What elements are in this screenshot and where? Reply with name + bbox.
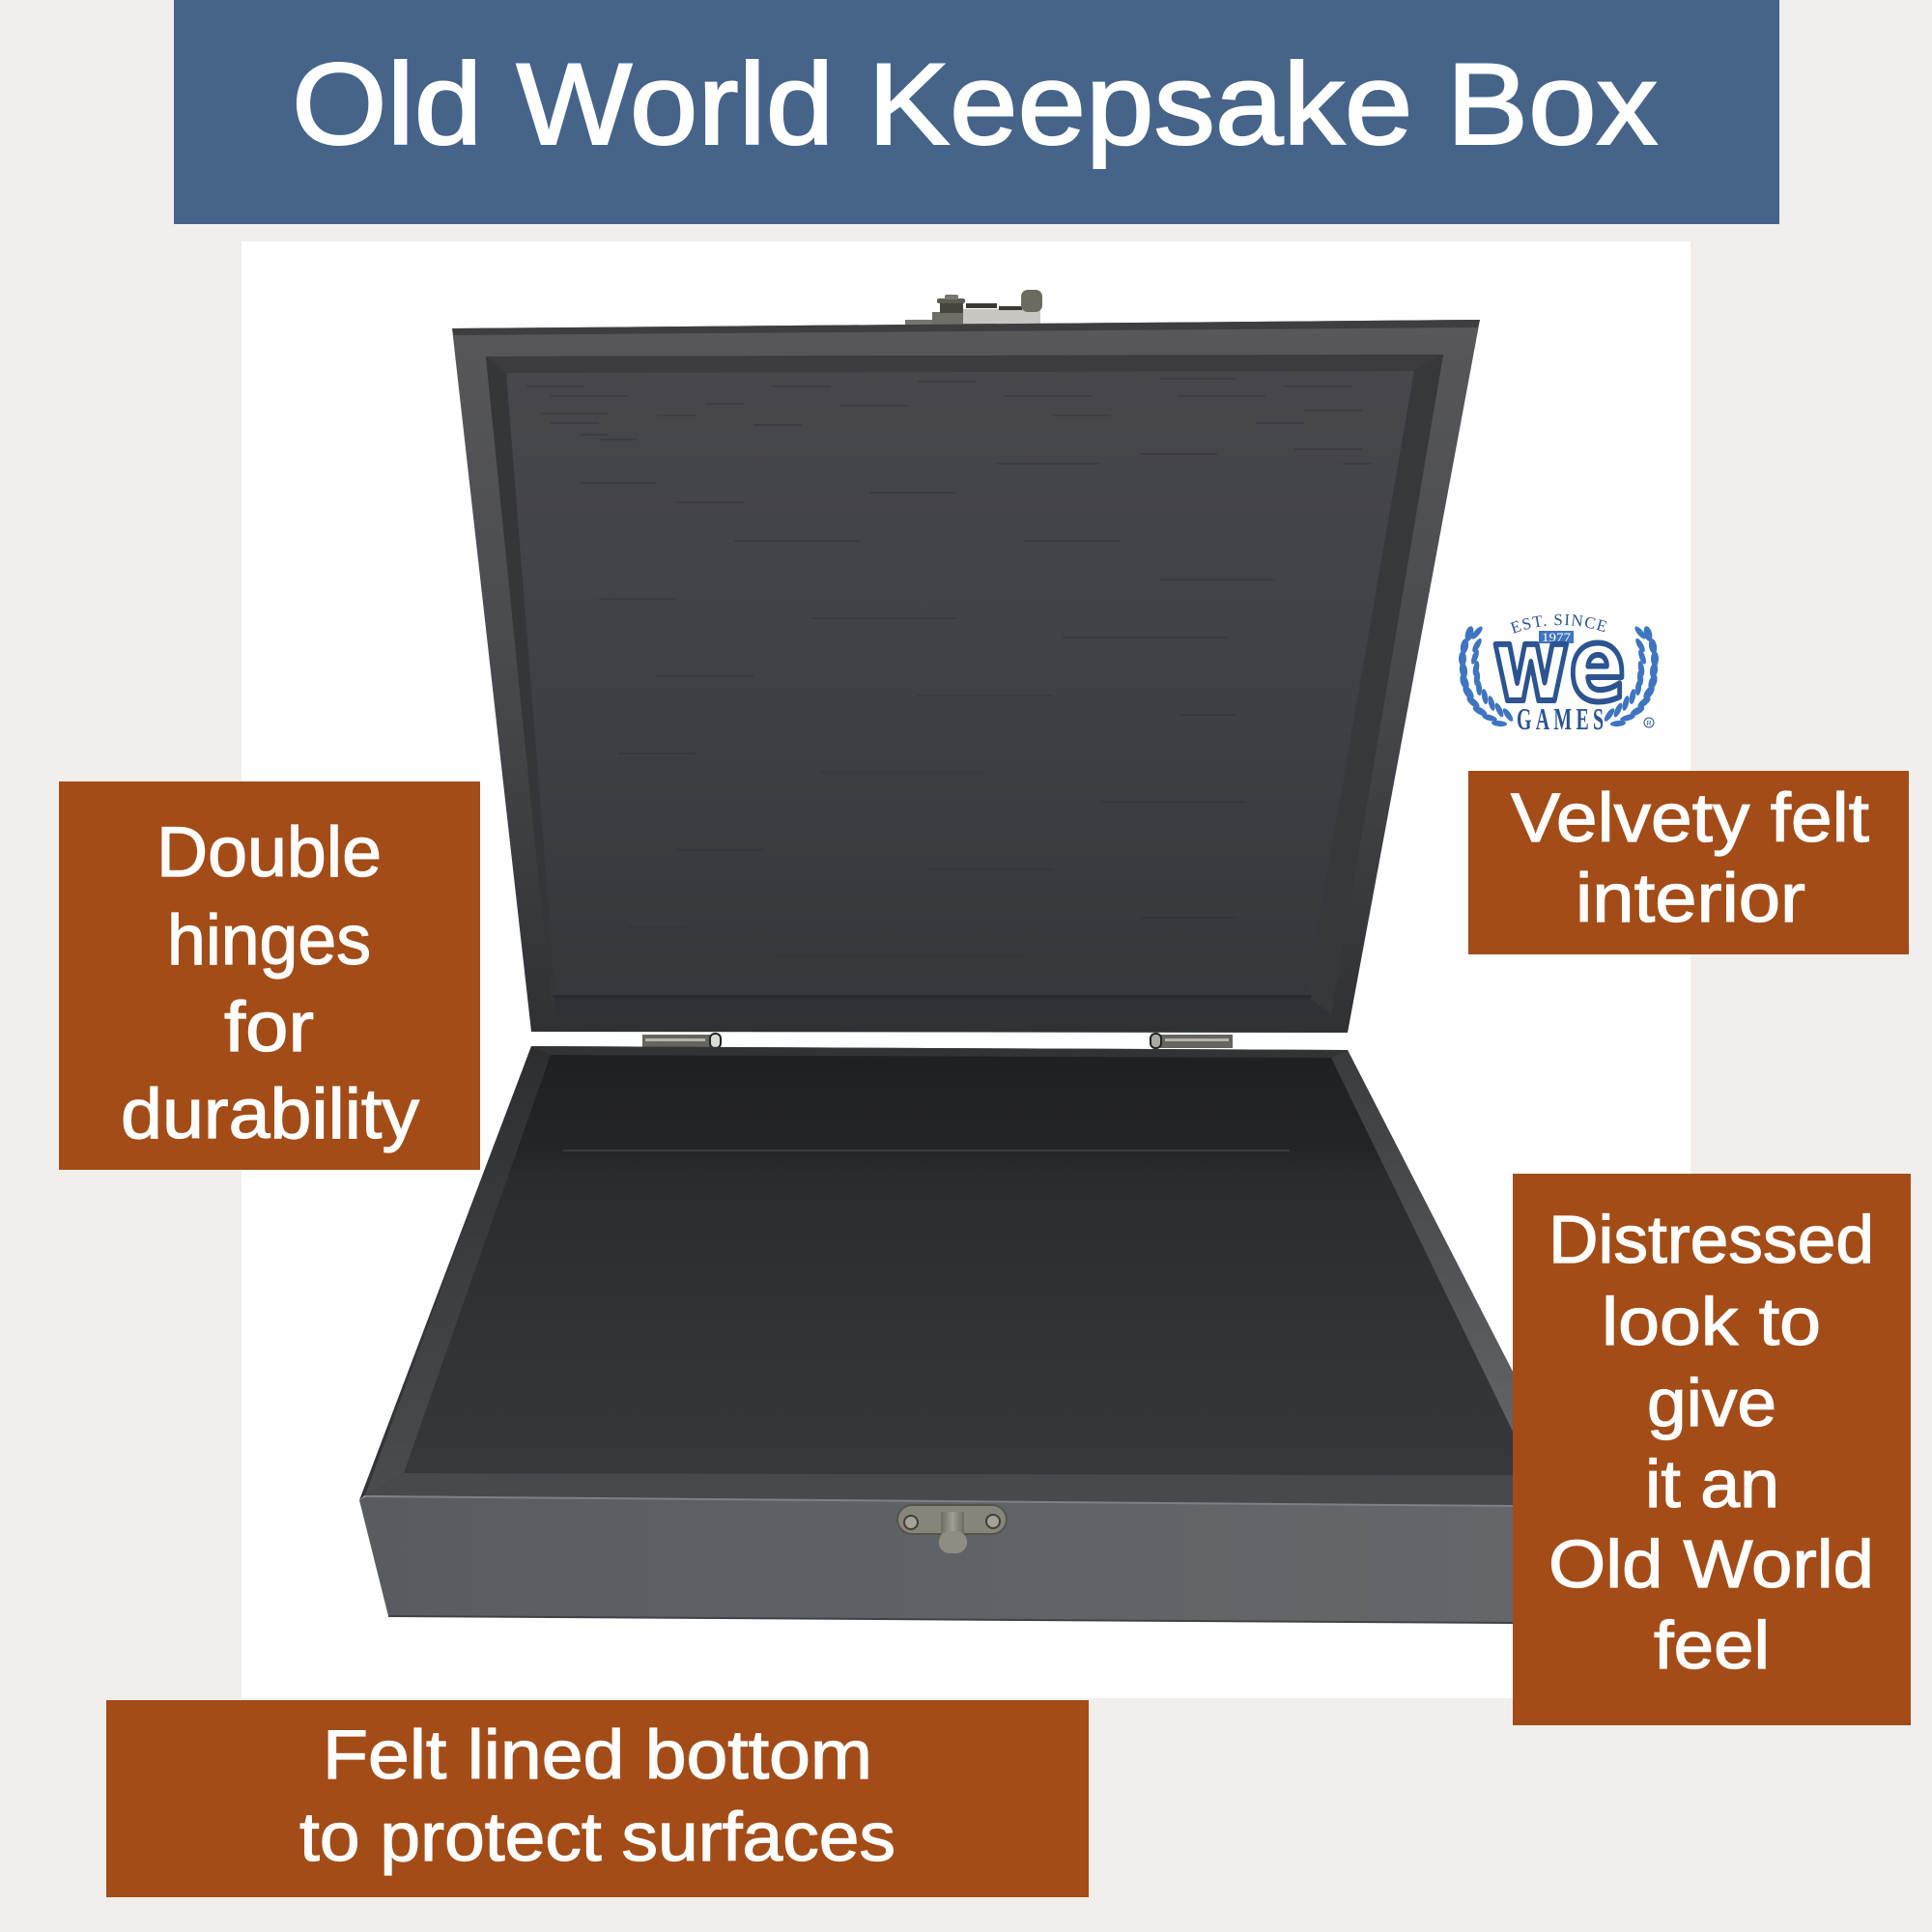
callout: double hinges: for: [224, 988, 314, 1066]
box base: [359, 1046, 1513, 1623]
callout: double hinges: [59, 781, 480, 1170]
callout: distressed look: look to: [1602, 1284, 1821, 1359]
games text: GAMES: [1517, 701, 1607, 736]
est since text: [1513, 625, 1633, 643]
product photo panel: [242, 242, 1690, 1698]
callout: felt lined bottom: Felt lined bottom: [323, 1718, 872, 1794]
callout: distressed look: feel: [1654, 1607, 1770, 1683]
felt lining: [404, 1055, 1513, 1475]
callout: distressed look: Distressed: [1548, 1202, 1874, 1277]
callout: double hinges: Double: [156, 813, 382, 892]
callout: velvety felt: [1468, 771, 1909, 954]
icon: right hinge: [1151, 1034, 1233, 1048]
laurel left: [1459, 625, 1515, 727]
front face: [359, 1496, 1513, 1623]
title banner: [174, 0, 1779, 224]
we wordmark: we: [1492, 606, 1626, 724]
callout: double hinges: durability: [121, 1075, 420, 1153]
icon: top clasp hardware: [905, 290, 1042, 325]
callout: velvety felt: Velvety felt: [1511, 781, 1869, 857]
registered mark: R: [1646, 721, 1652, 727]
callout: felt lined bottom: to protect surfaces: [299, 1800, 895, 1876]
box lid: [452, 320, 1480, 1033]
icon: front latch: [897, 1505, 1007, 1553]
callout: distressed look: Old World: [1548, 1526, 1874, 1602]
callout: distressed look: it an: [1645, 1446, 1779, 1521]
keepsake box illustration: [359, 290, 1513, 1623]
title banner: Old World Keepsake Box: [292, 40, 1658, 169]
icon: left hinge: [642, 1034, 721, 1048]
icon: We Games logo: [1459, 606, 1659, 736]
callout: velvety felt: interior: [1576, 861, 1805, 937]
callout: double hinges: hinges: [167, 901, 371, 980]
laurel right: [1603, 625, 1659, 727]
icon: We Games logo: EST. SINCE: [1510, 614, 1607, 634]
callout: felt lined bottom: [106, 1700, 1089, 1897]
lid interior panel: [506, 371, 1414, 995]
callout: distressed look: [1513, 1174, 1911, 1725]
registered mark: [1644, 718, 1654, 727]
year banner: 1977: [1542, 630, 1572, 644]
callout: distressed look: give: [1647, 1365, 1776, 1440]
